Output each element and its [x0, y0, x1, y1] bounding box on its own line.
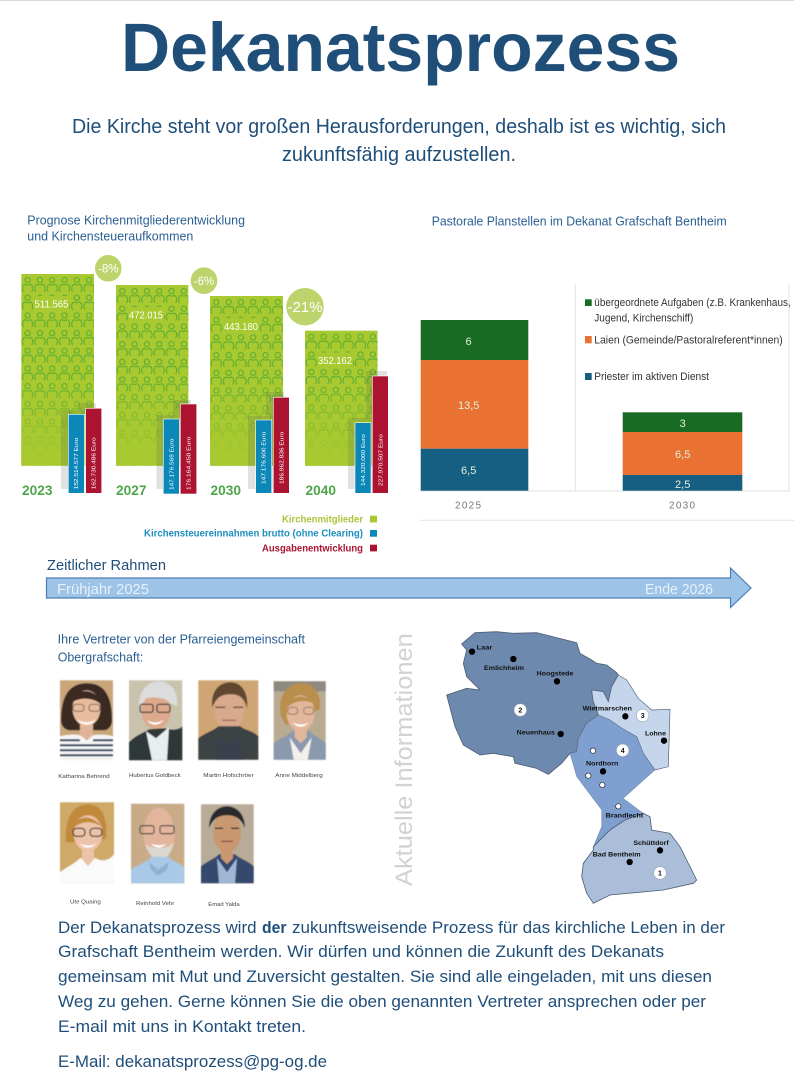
legend: membership forecast — [144, 514, 377, 555]
year labels: 2040 — [306, 482, 336, 498]
heading: membership forecast — [27, 213, 245, 244]
name: Martin Hofschröer: Martin Hofschröer — [203, 773, 254, 779]
stacked bar 2030: 2,5 — [675, 479, 690, 491]
legend: membership forecast: Ausgabenentwicklung — [262, 543, 363, 555]
legend: membership forecast: Kirchensteuereinnahmen brutto (ohne Clearing) — [144, 528, 363, 540]
numbered region badges — [514, 704, 666, 879]
tax bars 2027: 176.164.450 Euro — [186, 437, 192, 490]
legend: pastoral positions — [585, 297, 791, 383]
change badge -21%: -21% — [287, 299, 323, 316]
map: Grafschaft Bentheim — [447, 632, 697, 903]
body text: Der Dekanatsprozess wird — [58, 918, 256, 937]
members bar 2027 — [116, 285, 188, 466]
legend: pastoral positions: Jugend, Kirchenschiff) — [594, 313, 693, 325]
stacked bar 2025 — [421, 320, 528, 491]
numbered region badges: 1 — [658, 871, 662, 878]
tax bars 2030: 147.176.600 Euro — [262, 432, 268, 484]
subtitle: zukunftsfähig aufzustellen. — [282, 144, 516, 166]
stacked bar 2030 — [623, 412, 742, 491]
body text: Grafschaft Bentheim werden. Wir dürfen und können die Zukunft des Dekanats — [58, 942, 664, 961]
heading: representatives: Ihre Vertreter von der Pfarreiengemeinschaft — [58, 632, 306, 646]
members bar 2027: 472.015 — [129, 310, 163, 322]
arrow: timeline: Ende 2026 — [645, 582, 713, 598]
place names — [477, 644, 669, 859]
change badge -6% — [191, 267, 217, 294]
arrow: timeline — [46, 568, 751, 608]
subtitle: Die Kirche steht vor großen Herausforderungen, deshalb ist es wichtig, sich — [72, 116, 726, 138]
body text: zukunftsweisende Prozess für das kirchliche Leben in der — [292, 918, 725, 937]
place names: Lohne — [645, 731, 666, 738]
place markers — [469, 648, 667, 865]
change badge -8% — [95, 255, 122, 282]
heading: pastoral positions: Pastorale Planstellen im Dekanat Grafschaft Bentheim — [432, 215, 727, 229]
year labels — [22, 482, 336, 498]
place names: Nordhorn — [586, 760, 618, 767]
year labels: 2023 — [22, 482, 53, 498]
name: Anne Middelberg: Anne Middelberg — [275, 773, 323, 779]
legend: membership forecast: Kirchenmitglieder — [282, 514, 363, 526]
heading: representatives: Obergrafschaft: — [58, 651, 143, 665]
stacked bar 2030: 3 — [680, 418, 686, 430]
place names: Hoogstede — [537, 671, 574, 678]
legend: pastoral positions: Priester im aktiven Dienst — [594, 371, 709, 383]
place names: Neuenhaus — [517, 729, 555, 736]
tax bars 2030: 186.962.836 Euro — [279, 432, 285, 484]
photo: Reinhold Vehr — [131, 804, 184, 883]
axis labels — [455, 500, 695, 512]
tax bars 2023 — [68, 408, 102, 493]
body text: gemeinsam mit Mut und Zuversicht gestalten. Sie sind alle eingeladen, mit uns diesen — [58, 967, 712, 986]
arrow: timeline: Frühjahr 2025 — [57, 582, 149, 598]
tax bars 2040: 227.970.507 Euro — [378, 434, 384, 486]
chart: pastoral positions — [420, 284, 794, 520]
title: Dekanatsprozess — [121, 9, 680, 86]
numbered region badges: 4 — [621, 748, 625, 755]
legend: pastoral positions: Laien (Gemeinde/Pastoralreferent*innen) — [594, 334, 783, 346]
chart: members and church tax forecast — [21, 255, 388, 498]
tax bars 2040: 144.320.000 Euro — [361, 434, 367, 486]
heading: timeframe: Zeitlicher Rahmen — [47, 558, 166, 574]
tax bars 2027: 147.176.569 Euro — [169, 439, 175, 490]
members bar 2030 — [210, 296, 283, 466]
members bar 2023: 511.565 — [34, 298, 69, 310]
change badge -6%: -6% — [194, 276, 214, 288]
photo: Katharina Behrend — [60, 680, 113, 760]
tax bars 2027 — [163, 404, 197, 494]
photo: Hubertus Goldbeck — [129, 680, 182, 760]
vertical heading: current information: Aktuelle Informationen — [391, 633, 418, 886]
name: Hubertus Goldbeck: Hubertus Goldbeck — [129, 773, 181, 779]
photo: Emad Yalda — [201, 804, 254, 883]
heading: representatives — [58, 632, 306, 665]
name: Emad Yalda: Emad Yalda — [208, 902, 241, 908]
photo: Martin Hofschröer — [198, 680, 258, 760]
name: Ute Quaing: Ute Quaing — [70, 899, 101, 905]
photo: Ute Quaing — [60, 802, 114, 883]
place names: Emlichheim — [484, 665, 524, 672]
tax bars 2030 — [256, 397, 289, 493]
open place markers — [586, 748, 621, 809]
stacked bar 2025: 6 — [465, 336, 472, 348]
region 4 — [570, 715, 655, 847]
heading: membership forecast: und Kirchensteueraufkommen — [27, 230, 193, 244]
change badge -8%: -8% — [98, 264, 119, 276]
subtitle — [72, 116, 726, 166]
contact email: E-Mail: dekanatsprozess@pg-og.de — [58, 1052, 327, 1071]
region 3 — [592, 675, 670, 770]
body text: der — [262, 918, 287, 937]
name: Reinhold Vehr: Reinhold Vehr — [136, 901, 174, 907]
place names: Bad Bentheim — [593, 852, 641, 859]
place names: Wietmarschen — [583, 706, 632, 713]
year labels: 2027 — [116, 482, 147, 498]
photo: Anne Middelberg — [274, 681, 326, 760]
tax bars 2023: 152.514.577 Euro — [74, 438, 80, 489]
stacked bar 2025: 6,5 — [461, 465, 476, 477]
body text: Weg zu gehen. Gerne können Sie die oben genannten Vertreter ansprechen oder per — [58, 992, 706, 1011]
body text — [58, 918, 725, 1036]
place names: Brandlecht — [606, 813, 644, 820]
place names: Laar — [477, 644, 493, 651]
stacked bar 2025: 13,5 — [458, 400, 479, 412]
change badge -21% — [286, 288, 324, 325]
heading: membership forecast: Prognose Kirchenmitgliederentwicklung — [27, 213, 245, 227]
year labels: 2030 — [210, 482, 241, 498]
body text: E-mail mit uns in Kontakt treten. — [58, 1017, 306, 1036]
tax bars 2023: 162.730.486 Euro — [92, 437, 98, 489]
place names: Schüttdorf — [633, 840, 669, 847]
region 1 — [582, 813, 697, 903]
stacked bar 2030: 6,5 — [675, 449, 690, 461]
axis labels: 2025 — [455, 500, 481, 512]
name: Katharina Behrend: Katharina Behrend — [58, 774, 110, 780]
members bar 2023 — [21, 274, 94, 466]
region 2 — [447, 632, 618, 774]
members bar 2040: 352.162 — [318, 355, 352, 367]
tax bars 2040 — [355, 376, 388, 493]
bar shadows — [61, 371, 387, 489]
numbered region badges: 3 — [641, 713, 645, 720]
axis labels: 2030 — [669, 500, 695, 512]
numbered region badges: 2 — [518, 708, 522, 715]
members bar 2030: 443.180 — [224, 321, 258, 333]
members bar 2040 — [305, 331, 378, 466]
